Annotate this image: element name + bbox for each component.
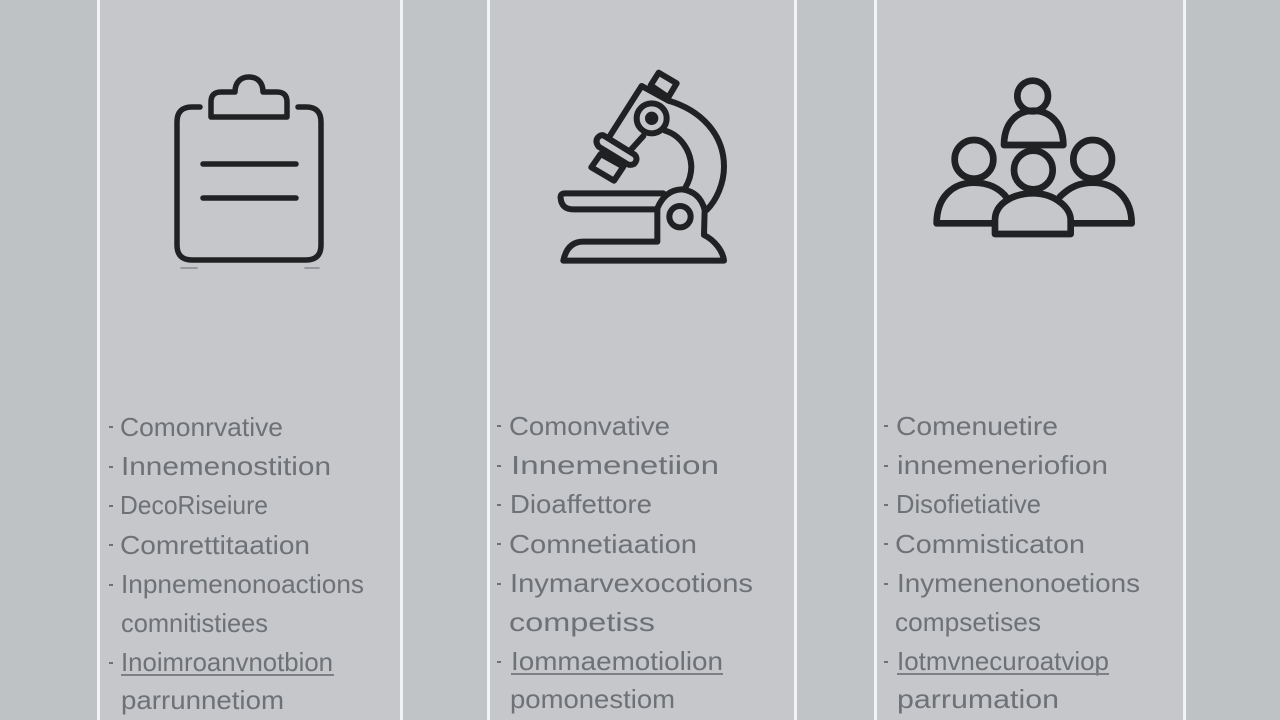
text block: right column list: compsetises xyxy=(895,607,1041,637)
text block: right column list: parrumation xyxy=(897,684,1059,714)
text block: right column list: Iotmvnecuroatviop xyxy=(897,646,1109,676)
text block: left column list xyxy=(109,412,364,715)
text block: right column list: Commisticaton xyxy=(895,529,1085,559)
panel: middle column xyxy=(487,0,797,720)
text block: middle column list: Comonvative xyxy=(509,411,670,441)
icon: microscope xyxy=(561,73,724,261)
text block: middle column list: Innemenetiion xyxy=(511,450,719,480)
text block: middle column list: Dioaffettore xyxy=(510,489,652,519)
text block: middle column list: pomonestiom xyxy=(510,684,675,714)
icon: clipboard xyxy=(177,77,321,268)
text block: left column list: Comrettitaation xyxy=(120,530,310,560)
text block: middle column list: Inymarvexocotions xyxy=(510,568,753,598)
text block: right column list: innemeneriofion xyxy=(897,450,1108,480)
text block: left column list: Innemenostition xyxy=(121,451,331,481)
text block: left column list: Inpnemenonoactions xyxy=(121,569,364,599)
panel: right column xyxy=(874,0,1186,720)
text block: left column list: Inoimroanvnotbion xyxy=(121,647,333,677)
text block: right column list: Inymenenonoetions xyxy=(897,568,1140,598)
text block: middle column list: Iommaemotiolion xyxy=(511,646,723,676)
icon: group of people xyxy=(937,81,1132,234)
text block: middle column list: competiss xyxy=(509,607,655,637)
text block: right column list: Disofietiative xyxy=(896,489,1041,519)
text block: left column list: parrunnetiom xyxy=(121,685,284,715)
text block: right column list: Comenuetire xyxy=(896,411,1058,441)
text block: middle column list xyxy=(497,411,753,714)
text block: left column list: comnitistiees xyxy=(121,608,268,638)
text block: left column list: Comonrvative xyxy=(120,412,283,442)
text block: right column list xyxy=(884,411,1140,714)
text block: left column list: DecoRiseiure xyxy=(120,490,268,520)
panel: left column xyxy=(97,0,403,720)
text block: middle column list: Comnetiaation xyxy=(509,529,697,559)
